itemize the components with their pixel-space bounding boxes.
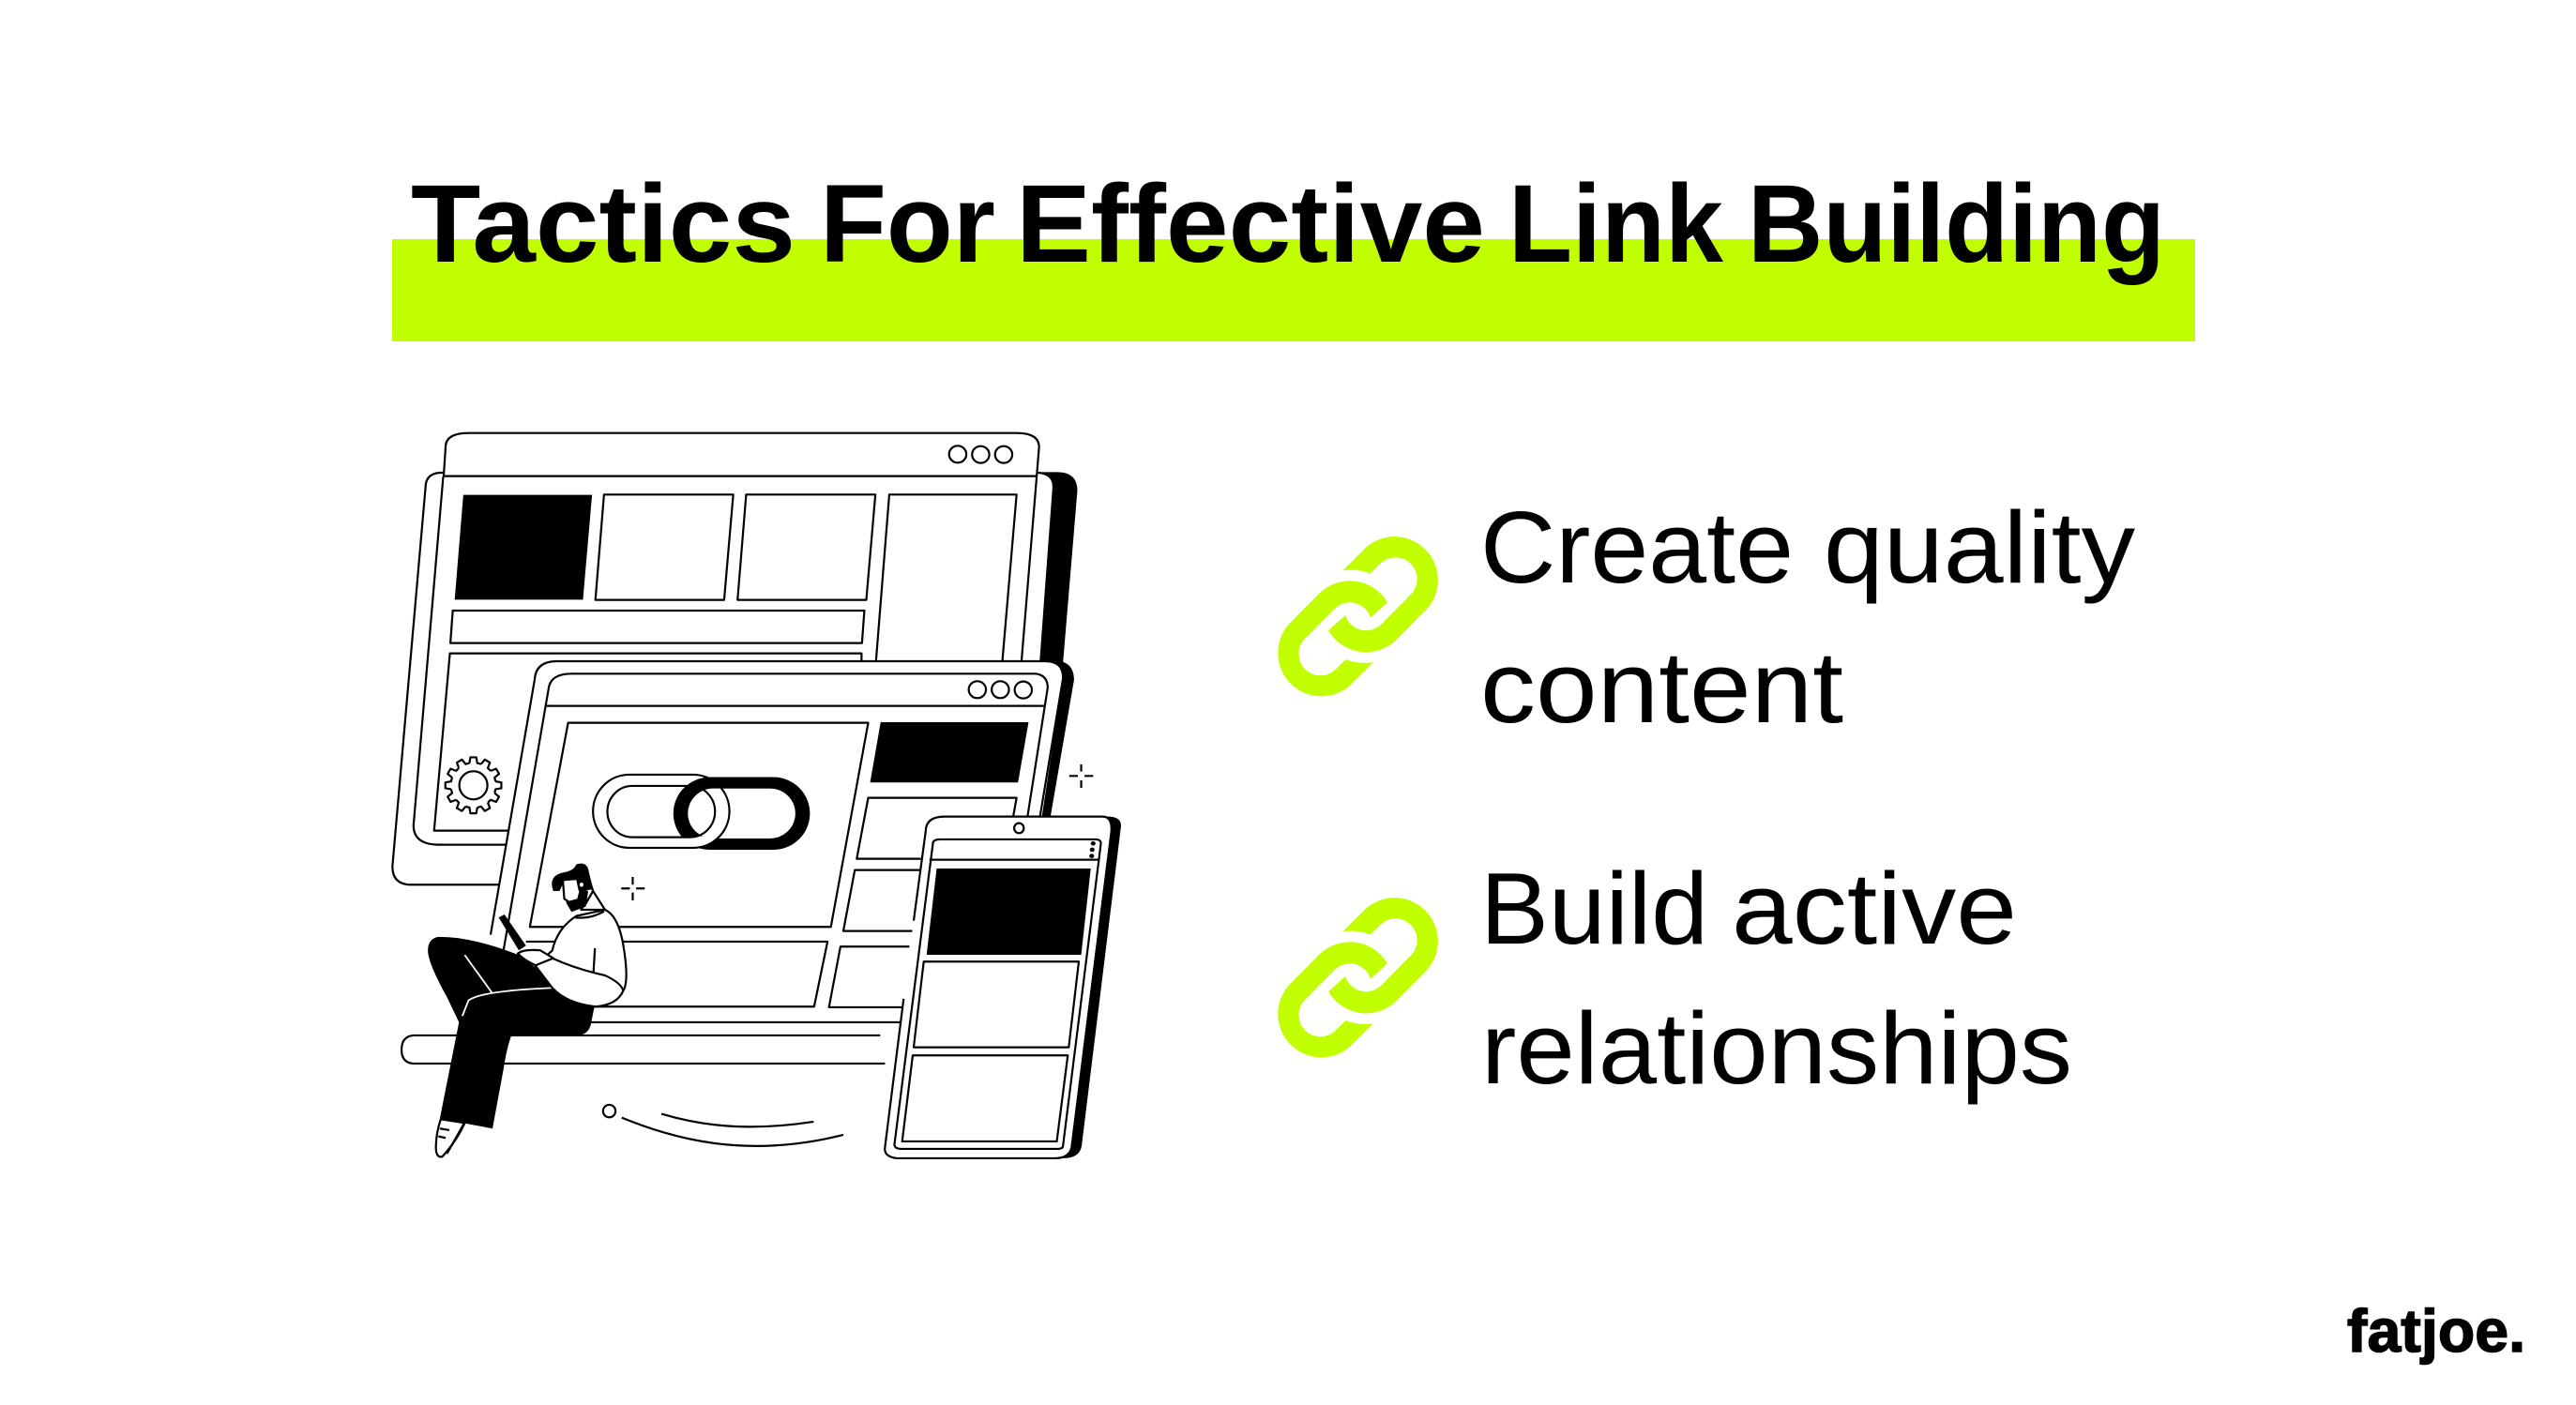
torso (536, 910, 627, 1006)
neck (581, 891, 605, 910)
held phone (499, 914, 526, 950)
phone tile (914, 961, 1079, 1048)
window shadow (1036, 472, 1077, 663)
trouser creases (462, 955, 553, 1016)
phone shadow (1045, 817, 1121, 1158)
phone body fill (885, 817, 1112, 1158)
item text (1480, 491, 2136, 745)
chain link illustration (593, 775, 810, 850)
side tile (829, 946, 909, 1007)
tablet screen outline (504, 673, 1048, 950)
item text: Build (1480, 852, 1708, 966)
phone camera (1014, 823, 1023, 833)
phone menu dots (1089, 841, 1096, 858)
face (563, 875, 593, 903)
item text: Create (1480, 491, 1794, 605)
person sitting with a phone (428, 864, 627, 1156)
title text: Effective (1016, 162, 1485, 286)
item text: active (1732, 852, 2017, 966)
tablet body fill (490, 661, 1063, 1050)
icon: chain link (1278, 536, 1438, 696)
item text: relationships (1481, 991, 2072, 1106)
black content block (871, 722, 1028, 782)
tablet body outline (491, 661, 1063, 935)
phone body outline (885, 817, 1112, 1158)
title (392, 162, 2195, 341)
item text: content (1480, 630, 1843, 745)
title text: Link (1508, 162, 1723, 286)
floor swoosh lines (603, 1105, 843, 1146)
list item: create quality content (1278, 491, 2136, 745)
phone black tile (927, 869, 1091, 955)
wide content panel (526, 942, 827, 1006)
tablet control dots (969, 681, 1032, 699)
window control dots (949, 446, 1012, 463)
icon: chain link (1278, 898, 1438, 1057)
hair (552, 864, 593, 891)
ear (580, 883, 583, 887)
title highlight bar (392, 239, 2195, 341)
title text (411, 162, 2165, 286)
title text: Tactics (411, 162, 796, 286)
title text: For (820, 162, 995, 286)
item text: quality (1824, 491, 2136, 605)
item text (1480, 852, 2072, 1106)
tall content tile (876, 494, 1017, 663)
sparkle (621, 877, 644, 900)
main link panel (530, 723, 869, 927)
large content panel (434, 654, 861, 831)
content tile (596, 494, 734, 600)
icon: gear (446, 757, 502, 813)
title text: Building (1748, 162, 2165, 286)
bench (402, 1035, 887, 1064)
sparkle (1069, 764, 1093, 788)
phone screen (894, 839, 1101, 1149)
black content tile (455, 495, 592, 599)
window title bar (444, 433, 1039, 476)
phone tile (902, 1055, 1068, 1141)
phone header line (930, 859, 1099, 861)
trousers (428, 937, 595, 1128)
collar and sleeve (553, 912, 623, 991)
hand (518, 950, 553, 965)
content tile (737, 494, 875, 600)
content bar (450, 611, 864, 643)
side tile (856, 798, 1017, 859)
tablet shadow (1036, 661, 1074, 819)
illustration: web windows, phone and seated person (392, 433, 1121, 1158)
back browser window (392, 433, 1077, 884)
shoe (436, 1119, 464, 1156)
tablet title bar line (547, 705, 1045, 707)
list item: build active relationships (1278, 852, 2072, 1106)
tablet window (490, 661, 1093, 1050)
logo: fatjoe: fatjoe. (2347, 1297, 2525, 1365)
phone (885, 817, 1121, 1158)
window outer body (392, 473, 1053, 884)
side tile (843, 870, 921, 931)
window inner screen (414, 476, 514, 845)
tablet bottom edge (585, 1021, 902, 1023)
beard (566, 888, 588, 912)
